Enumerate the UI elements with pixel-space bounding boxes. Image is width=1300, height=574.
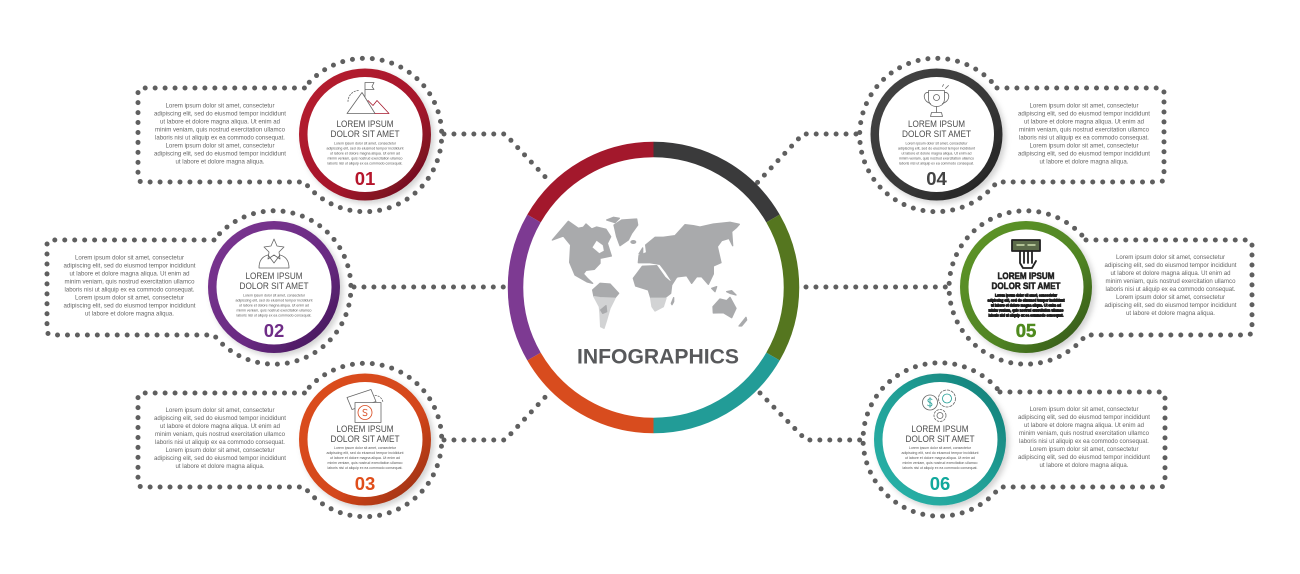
badge 04 xyxy=(870,68,1002,200)
description 04: Lorem ipsum dolor sit amet, consectetur xyxy=(1030,102,1139,110)
body 05: adipiscing elit, sed do eiusmod tempor incididunt xyxy=(988,298,1064,302)
heading 02: DOLOR SIT AMET xyxy=(240,281,309,292)
description 01: Lorem ipsum dolor sit amet, consectetur xyxy=(166,142,275,150)
dotted outline 02 xyxy=(47,211,351,364)
description 05: Lorem ipsum dolor sit amet, consectetur xyxy=(1116,294,1226,301)
heading 01: DOLOR SIT AMET xyxy=(330,129,400,140)
description 01: adipiscing elit, sed do eiusmod tempor incididunt xyxy=(154,150,286,158)
description 05: adipiscing elit, sed do eiusmod tempor incididunt xyxy=(1104,262,1237,269)
panel: 05 xyxy=(949,211,1252,364)
heading 04: DOLOR SIT AMET xyxy=(902,129,971,140)
number 02: 02 xyxy=(264,320,284,341)
dotted outline 01 xyxy=(138,58,442,212)
body 01: minim veniam, quis nostrud exercitation ullamco xyxy=(328,156,402,160)
heading 04 xyxy=(902,119,971,140)
heading 01: LOREM IPSUM xyxy=(336,119,394,130)
icon: money cards xyxy=(347,390,383,422)
connector: 04 to hub xyxy=(757,134,856,183)
heading 05 xyxy=(992,271,1061,292)
body 06: minim veniam, quis nostrud exercitation ullamco xyxy=(902,461,978,465)
description 05: ut labore et dolore magna aliqua. Ut enim ad xyxy=(1110,270,1231,277)
ring segment: black xyxy=(654,150,773,218)
connector: 02 to hub xyxy=(354,284,506,290)
number 03: 03 xyxy=(355,473,375,494)
body 05 xyxy=(988,294,1064,318)
dotted outline 04 xyxy=(860,58,1164,212)
ring segment: teal xyxy=(654,356,773,426)
body 02: adipiscing elit, sed do eiusmod tempor incididunt xyxy=(236,298,312,302)
body 03: minim veniam, quis nostrud exercitation ullamco xyxy=(328,461,402,465)
body 02: laboris nisi ut aliquip ex ea commodo consequat. xyxy=(236,314,312,318)
description 03: laboris nisi ut aliquip ex ea commodo consequat. xyxy=(155,439,285,446)
panel: 04 xyxy=(860,58,1164,212)
body 06: laboris nisi ut aliquip ex ea commodo consequat. xyxy=(902,466,978,470)
description 04: adipiscing elit, sed do eiusmod tempor incididunt xyxy=(1018,150,1150,158)
ring segment: green xyxy=(773,218,791,356)
description 04: ut labore et dolore magna aliqua. Ut enim ad xyxy=(1024,118,1144,126)
badge 05 xyxy=(960,221,1092,353)
panel: 02 xyxy=(47,211,351,364)
heading 01 xyxy=(330,119,400,140)
description 03 xyxy=(154,407,286,470)
description 06: ut labore et dolore magna aliqua. xyxy=(1040,462,1129,469)
description 01: adipiscing elit, sed do eiusmod tempor incididunt xyxy=(154,110,286,118)
dotted outline 06 xyxy=(863,363,1165,516)
badge 03 xyxy=(299,374,431,506)
description 06: Lorem ipsum dolor sit amet, consectetur xyxy=(1030,406,1139,413)
description 05: ut labore et dolore magna aliqua. xyxy=(1126,310,1215,317)
body 05: Lorem ipsum dolor sit amet, consectetur xyxy=(995,294,1058,298)
body 01: Lorem ipsum dolor sit amet, consectetur xyxy=(334,142,397,146)
description 02 xyxy=(64,254,196,318)
description 04: minim veniam, quis nostrud exercitation ullamco xyxy=(1019,126,1149,134)
description 05: Lorem ipsum dolor sit amet, consectetur xyxy=(1116,254,1226,261)
icon: star person xyxy=(259,239,289,268)
number 05: 05 xyxy=(1016,320,1036,341)
connector: 06 to hub xyxy=(760,393,862,440)
ring segment: red xyxy=(534,150,654,218)
description 02: ut labore et dolore magna aliqua. Ut enim ad xyxy=(70,270,190,278)
body 01: adipiscing elit, sed do eiusmod tempor incididunt xyxy=(326,146,404,150)
description 03: minim veniam, quis nostrud exercitation ullamco xyxy=(155,431,285,438)
body 02: Lorem ipsum dolor sit amet, consectetur xyxy=(243,294,306,298)
icon: trophy xyxy=(924,84,949,116)
connector: 05 to hub xyxy=(806,284,950,290)
body 03 xyxy=(326,446,404,470)
body 03: Lorem ipsum dolor sit amet, consectetur xyxy=(334,446,397,450)
body 03: adipiscing elit, sed do eiusmod tempor incididunt xyxy=(326,451,404,455)
heading 06: LOREM IPSUM xyxy=(912,424,969,435)
heading 06 xyxy=(906,424,975,445)
description 02: Lorem ipsum dolor sit amet, consectetur xyxy=(75,294,185,302)
description 02: ut labore et dolore magna aliqua. xyxy=(85,310,174,318)
heading 04: LOREM IPSUM xyxy=(908,119,965,130)
body 02: ut labore et dolore magna aliqua. Ut enim ad xyxy=(239,304,309,308)
body 04: laboris nisi ut aliquip ex ea commodo consequat. xyxy=(899,162,974,166)
heading 05: DOLOR SIT AMET xyxy=(992,281,1061,292)
panel: 01 xyxy=(138,58,442,212)
number 04: 04 xyxy=(926,168,947,189)
description 06: ut labore et dolore magna aliqua. Ut enim ad xyxy=(1024,422,1144,429)
description 06: adipiscing elit, sed do eiusmod tempor incididunt xyxy=(1018,454,1150,461)
connector: 03 to hub xyxy=(444,392,550,440)
description 03: Lorem ipsum dolor sit amet, consectetur xyxy=(166,447,275,454)
icon: coin and gears xyxy=(922,390,956,422)
description 04: Lorem ipsum dolor sit amet, consectetur xyxy=(1030,142,1139,150)
body 05: laboris nisi ut aliquip ex ea commodo consequat. xyxy=(988,314,1064,318)
dotted outline 03 xyxy=(138,363,442,517)
description 05: laboris nisi ut aliquip ex ea commodo consequat. xyxy=(1106,286,1236,293)
description 04 xyxy=(1018,102,1150,166)
icon: hand and banknote xyxy=(1012,240,1040,268)
description 01: Lorem ipsum dolor sit amet, consectetur xyxy=(166,102,275,110)
description 06: minim veniam, quis nostrud exercitation ullamco xyxy=(1019,430,1149,437)
body 06: ut labore et dolore magna aliqua. Ut enim ad xyxy=(905,456,975,460)
description 01: ut labore et dolore magna aliqua. Ut enim ad xyxy=(160,118,280,126)
description 04: ut labore et dolore magna aliqua. xyxy=(1040,158,1129,166)
heading 06: DOLOR SIT AMET xyxy=(906,434,975,445)
body 06: adipiscing elit, sed do eiusmod tempor incididunt xyxy=(902,451,978,455)
description 05: adipiscing elit, sed do eiusmod tempor incididunt xyxy=(1104,302,1237,309)
description 06: Lorem ipsum dolor sit amet, consectetur xyxy=(1030,446,1139,453)
body 04 xyxy=(898,142,975,166)
heading 02: LOREM IPSUM xyxy=(246,271,303,282)
description 03: ut labore et dolore magna aliqua. Ut enim ad xyxy=(160,423,280,430)
panel: 03 xyxy=(138,363,442,517)
badge 02 xyxy=(208,221,340,353)
body 05: ut labore et dolore magna aliqua. Ut enim ad xyxy=(991,304,1061,308)
description 01: minim veniam, quis nostrud exercitation ullamco xyxy=(155,126,285,134)
badge 01 xyxy=(299,68,431,200)
description 01: laboris nisi ut aliquip ex ea commodo consequat. xyxy=(155,134,285,142)
connector: 01 to hub xyxy=(444,134,550,182)
heading 02 xyxy=(240,271,309,292)
description 02: adipiscing elit, sed do eiusmod tempor incididunt xyxy=(64,262,196,270)
description 04: laboris nisi ut aliquip ex ea commodo consequat. xyxy=(1019,134,1149,142)
heading 03: LOREM IPSUM xyxy=(336,424,394,435)
body 02: minim veniam, quis nostrud exercitation ullamco xyxy=(236,308,312,312)
body 04: Lorem ipsum dolor sit amet, consectetur xyxy=(906,142,968,146)
world map xyxy=(552,217,747,328)
body 01: laboris nisi ut aliquip ex ea commodo consequat. xyxy=(328,162,402,166)
body 02 xyxy=(236,294,312,318)
description 05: minim veniam, quis nostrud exercitation ullamco xyxy=(1106,278,1236,285)
description 06: laboris nisi ut aliquip ex ea commodo consequat. xyxy=(1019,438,1149,445)
body 06: Lorem ipsum dolor sit amet, consectetur xyxy=(909,446,972,450)
ring segment: orange xyxy=(534,356,654,426)
hub title: INFOGRAPHICS xyxy=(577,346,739,368)
heading 03: DOLOR SIT AMET xyxy=(330,434,400,445)
number 06: 06 xyxy=(930,473,950,494)
description 05 xyxy=(1104,254,1237,317)
body 05: minim veniam, quis nostrud exercitation ullamco xyxy=(988,308,1064,312)
description 03: Lorem ipsum dolor sit amet, consectetur xyxy=(166,407,275,414)
body 03: ut labore et dolore magna aliqua. Ut enim ad xyxy=(330,456,400,460)
description 06 xyxy=(1018,406,1150,469)
description 02: adipiscing elit, sed do eiusmod tempor incididunt xyxy=(64,302,196,310)
dotted outline 05 xyxy=(949,211,1252,364)
description 02: laboris nisi ut aliquip ex ea commodo consequat. xyxy=(64,286,195,294)
description 01 xyxy=(154,102,286,166)
body 04: ut labore et dolore magna aliqua. Ut enim ad xyxy=(902,152,972,156)
body 03: laboris nisi ut aliquip ex ea commodo consequat. xyxy=(328,466,402,470)
description 03: adipiscing elit, sed do eiusmod tempor incididunt xyxy=(154,415,286,422)
description 03: adipiscing elit, sed do eiusmod tempor incididunt xyxy=(154,455,286,462)
description 02: minim veniam, quis nostrud exercitation ullamco xyxy=(64,278,195,286)
badge 06 xyxy=(874,374,1006,506)
description 04: adipiscing elit, sed do eiusmod tempor incididunt xyxy=(1018,110,1150,118)
body 01: ut labore et dolore magna aliqua. Ut enim ad xyxy=(330,152,400,156)
central hub xyxy=(516,150,791,426)
heading 03 xyxy=(330,424,400,445)
body 04: minim veniam, quis nostrud exercitation ullamco xyxy=(899,156,974,160)
body 06 xyxy=(902,446,978,470)
body 01 xyxy=(326,142,404,166)
number 01: 01 xyxy=(355,168,375,189)
description 03: ut labore et dolore magna aliqua. xyxy=(176,463,265,470)
description 06: adipiscing elit, sed do eiusmod tempor incididunt xyxy=(1018,414,1150,421)
panel: 06 xyxy=(863,363,1165,516)
icon: mountain flag xyxy=(347,82,389,114)
body 04: adipiscing elit, sed do eiusmod tempor incididunt xyxy=(898,146,975,150)
description 01: ut labore et dolore magna aliqua. xyxy=(176,158,265,166)
heading 05: LOREM IPSUM xyxy=(998,271,1054,282)
description 02: Lorem ipsum dolor sit amet, consectetur xyxy=(75,254,185,262)
ring segment: purple xyxy=(516,218,534,356)
